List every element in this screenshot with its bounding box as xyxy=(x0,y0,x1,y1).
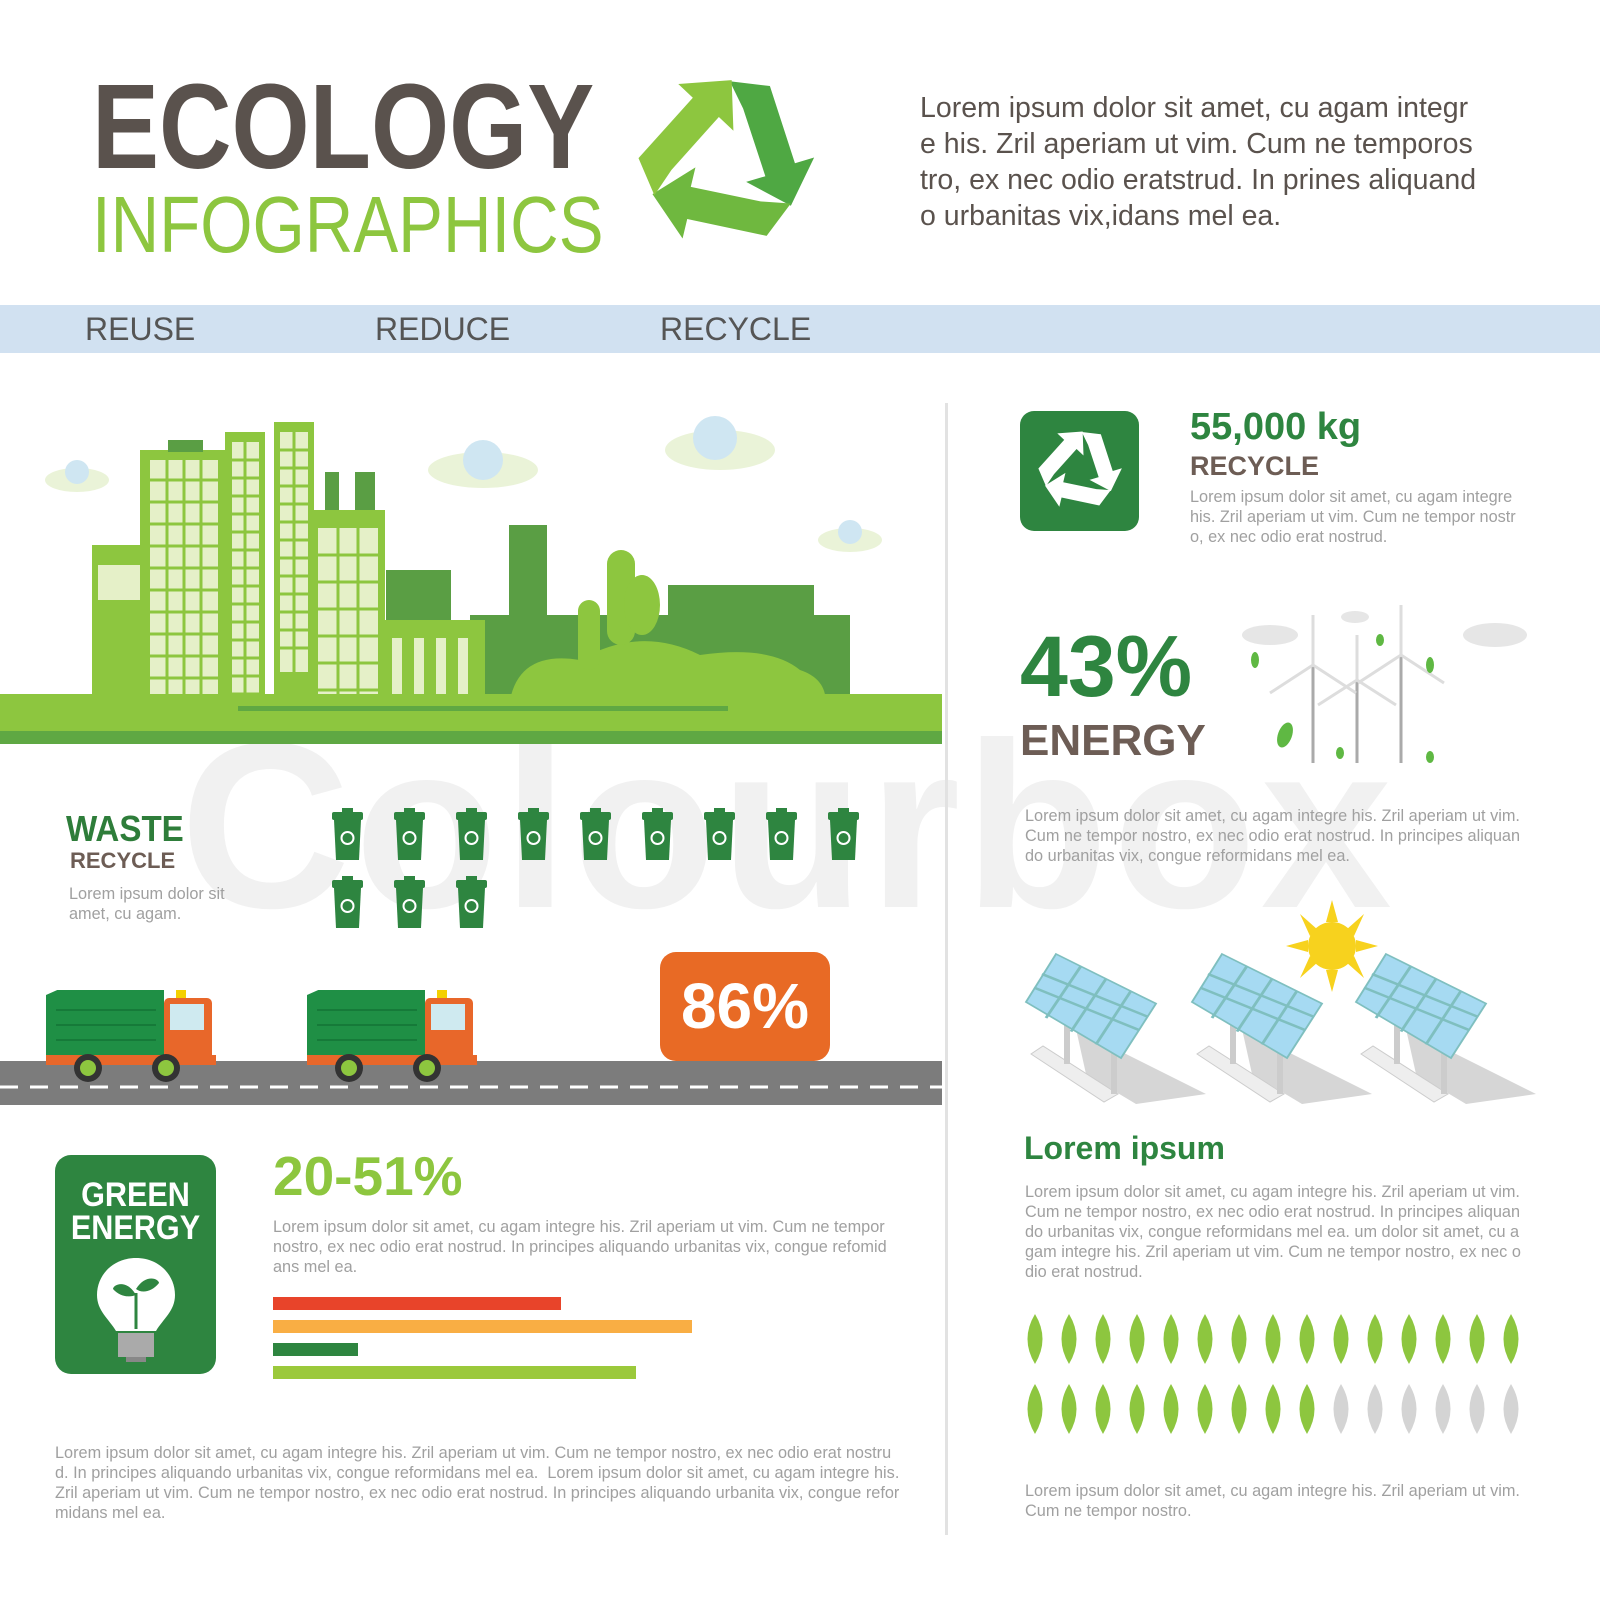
header paragraph: o urbanitas vix,idans mel ea. xyxy=(920,200,1281,232)
stat: 55,000 kg recycle: o, ex nec odio erat nostrud. xyxy=(1190,528,1387,546)
illustration: solar panels and sun xyxy=(1024,900,1536,1104)
title xyxy=(92,58,604,269)
text block: waste recycle: amet, cu agam. xyxy=(69,905,181,923)
stat: 43% energy: ENERGY xyxy=(1020,716,1206,765)
final paragraph: Cum ne tempor nostro. xyxy=(1025,1502,1192,1520)
header paragraph: tro, ex nec odio eratstrud. In prines aliquand xyxy=(920,164,1476,196)
band: reuse reduce recycle: REUSE xyxy=(85,311,195,347)
paragraph xyxy=(1025,1183,1521,1281)
paragraph: Lorem ipsum dolor sit amet, cu agam integre his. Zril aperiam ut vim. Cum ne tempor xyxy=(273,1218,885,1236)
header paragraph: e his. Zril aperiam ut vim. Cum ne temporos xyxy=(920,128,1473,160)
bottom paragraph: Zril aperiam ut vim. Cum ne tempor nostro, ex nec odio erat nostrud. In principes aliquando urbanita vix, congue refor xyxy=(55,1484,899,1502)
bottom paragraph: Lorem ipsum dolor sit amet, cu agam integre his. Zril aperiam ut vim. Cum ne tempor nostro, ex nec odio erat nostru xyxy=(55,1444,891,1462)
text block: waste recycle xyxy=(66,808,225,923)
bar chart xyxy=(273,1297,692,1379)
stat: 20-51%: 20-51% xyxy=(273,1145,463,1207)
band: reuse reduce recycle xyxy=(0,305,1600,353)
stat: 55,000 kg recycle: RECYCLE xyxy=(1190,451,1319,481)
stat: 43% energy xyxy=(1020,619,1206,765)
stat: 55,000 kg recycle xyxy=(1190,406,1516,546)
icons: waste bins xyxy=(332,808,859,928)
text block: waste recycle: Lorem ipsum dolor sit xyxy=(69,885,225,903)
stat: 55,000 kg recycle: 55,000 kg xyxy=(1190,406,1361,448)
paragraph xyxy=(1025,807,1520,865)
paragraph xyxy=(273,1218,887,1276)
icon: wind turbines xyxy=(1242,605,1527,763)
panel: green energy xyxy=(55,1155,216,1374)
text block: waste recycle: WASTE xyxy=(66,808,184,849)
header paragraph xyxy=(920,92,1476,232)
illustration: city xyxy=(0,416,942,744)
paragraph: gam integre his. Zril aperiam ut vim. Cum ne tempor nostro, ex nec o xyxy=(1025,1243,1521,1261)
paragraph: do urbanitas vix, congue reformidans mel ea. xyxy=(1025,847,1350,865)
paragraph: Cum ne tempor nostro, ex nec odio erat nostrud. In principes aliquan xyxy=(1025,827,1520,845)
bottom paragraph xyxy=(55,1444,899,1522)
band: reuse reduce recycle: RECYCLE xyxy=(660,311,811,347)
bottom paragraph: d. In principes aliquando urbanitas vix, congue reformidans mel ea. Lorem ipsum dolor sit amet, cu agam integre his. xyxy=(55,1464,899,1482)
icon: recycle logo xyxy=(638,80,814,238)
divider xyxy=(945,403,948,1535)
paragraph: ans mel ea. xyxy=(273,1258,357,1276)
paragraph: do urbanitas vix, congue reformidans mel ea. um dolor sit amet, cu a xyxy=(1025,1223,1519,1241)
paragraph: Lorem ipsum dolor sit amet, cu agam integre his. Zril aperiam ut vim. xyxy=(1025,1183,1520,1201)
callout: 86%: 86% xyxy=(681,970,809,1042)
paragraph: Cum ne tempor nostro, ex nec odio erat nostrud. In principes aliquan xyxy=(1025,1203,1520,1221)
bottom paragraph: midans mel ea. xyxy=(55,1504,165,1522)
callout: 86% xyxy=(660,952,830,1061)
stat: 43% energy: 43% xyxy=(1020,619,1192,715)
chart: leaves xyxy=(1028,1314,1518,1434)
final paragraph xyxy=(1025,1482,1520,1520)
paragraph: dio erat nostrud. xyxy=(1025,1263,1143,1281)
icon: recycle box xyxy=(1020,411,1139,531)
title: ECOLOGY xyxy=(92,58,594,194)
panel: green energy: ENERGY xyxy=(71,1209,200,1247)
paragraph: Lorem ipsum dolor sit amet, cu agam integre his. Zril aperiam ut vim. xyxy=(1025,807,1520,825)
road with trucks xyxy=(0,990,942,1105)
stat: 55,000 kg recycle: his. Zril aperiam ut vim. Cum ne tempor nostr xyxy=(1190,508,1516,526)
title: INFOGRAPHICS xyxy=(92,180,604,269)
band: reuse reduce recycle: REDUCE xyxy=(375,311,510,347)
heading: lorem ipsum: Lorem ipsum xyxy=(1024,1130,1225,1166)
panel: green energy: GREEN xyxy=(81,1176,190,1214)
icon: light bulb xyxy=(97,1258,175,1362)
stat: 55,000 kg recycle: Lorem ipsum dolor sit amet, cu agam integre xyxy=(1190,488,1512,506)
watermark: Colourbox xyxy=(180,694,1396,958)
header paragraph: Lorem ipsum dolor sit amet, cu agam integr xyxy=(920,92,1468,124)
text block: waste recycle: RECYCLE xyxy=(70,848,175,873)
paragraph: nostro, ex nec odio erat nostrud. In principes aliquando urbanitas vix, congue refomid xyxy=(273,1238,887,1256)
final paragraph: Lorem ipsum dolor sit amet, cu agam integre his. Zril aperiam ut vim. xyxy=(1025,1482,1520,1500)
